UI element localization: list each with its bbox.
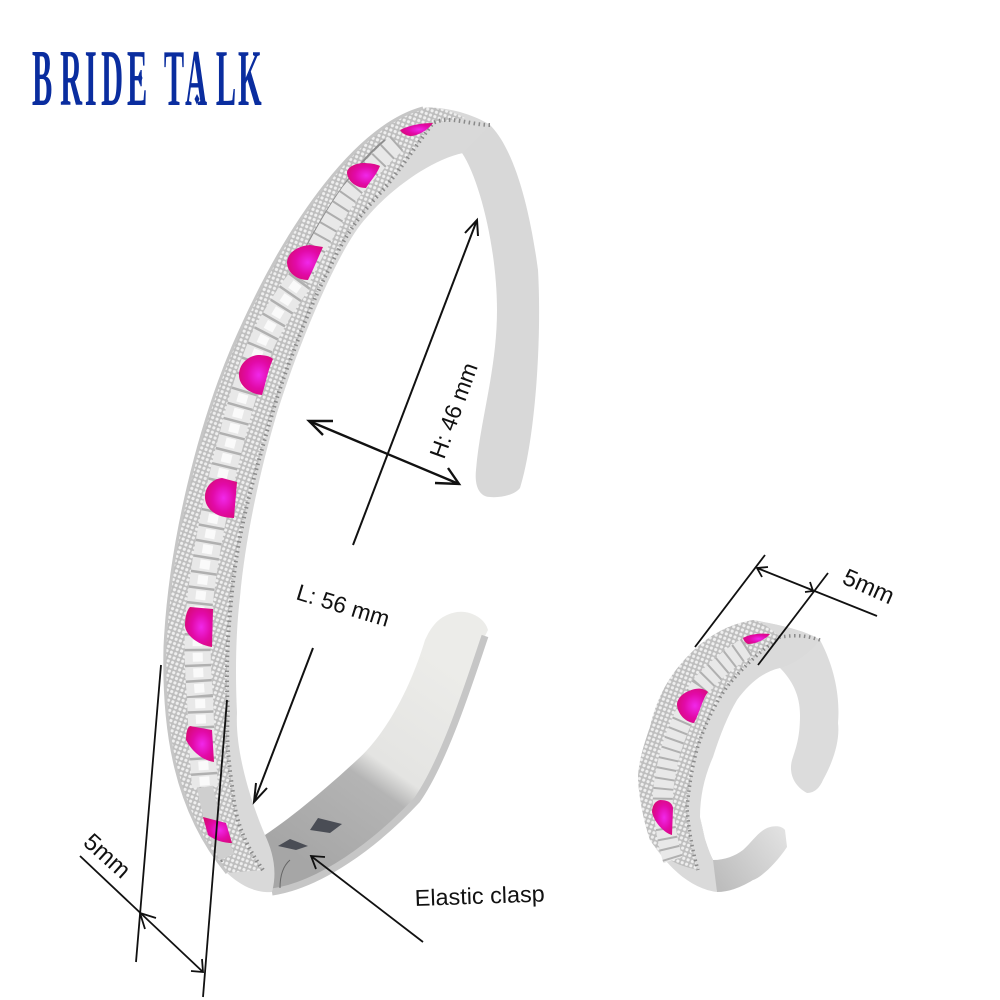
bangle bracelet: [165, 107, 539, 892]
pave serrated edge: [227, 120, 490, 870]
dimension arrow: diameter cross: [309, 421, 459, 484]
ring baguette stones: [663, 647, 747, 860]
bangle front arm inner surface: [265, 612, 488, 892]
dimension arrow: length 56 mm: [254, 648, 313, 802]
ring ruby stones: [652, 634, 770, 835]
ring: [638, 620, 838, 892]
baguette channel groove: [187, 140, 385, 862]
ring pave band: [638, 620, 780, 870]
ring pave serrated edge: [687, 636, 820, 870]
label: H 46 mm: H: 46 mm: [424, 359, 483, 462]
ruby stones: [185, 123, 433, 843]
ring baguette facets: [663, 647, 747, 860]
arrow: elastic clasp: [311, 856, 423, 942]
label: elastic clasp: Elastic clasp: [414, 880, 545, 911]
dimension: ring width 5mm: [695, 555, 877, 665]
pave stone band: [165, 107, 465, 873]
bangle back arm: [458, 121, 539, 497]
logo: BRIDE TALK: BRIDETALK: [32, 35, 262, 124]
ring back arm: [753, 620, 838, 793]
ring front arm inner surface: [700, 817, 787, 892]
baguette stones top facets: [300, 143, 397, 280]
baguette stones top: [300, 143, 397, 280]
dimension arrow: height 46 mm: [353, 220, 478, 545]
label: bangle 5mm: 5mm: [78, 828, 136, 884]
pave outer metal rim: [165, 108, 423, 873]
label: L 56 mm: L: 56 mm: [294, 579, 393, 632]
clasp seam: [280, 860, 290, 888]
baguette stones middle facets: [198, 280, 300, 787]
clasp openings: [278, 818, 342, 850]
baguette stones highlight: [198, 280, 300, 787]
dimension: bangle width 5mm: [80, 665, 227, 997]
ring metal band: [638, 620, 820, 892]
bangle metal band: [165, 108, 490, 892]
bangle lower rim: [272, 636, 485, 892]
baguette stones bottom: [205, 787, 227, 857]
baguette stones middle: [198, 280, 300, 787]
label: ring 5mm: 5mm: [839, 564, 898, 610]
